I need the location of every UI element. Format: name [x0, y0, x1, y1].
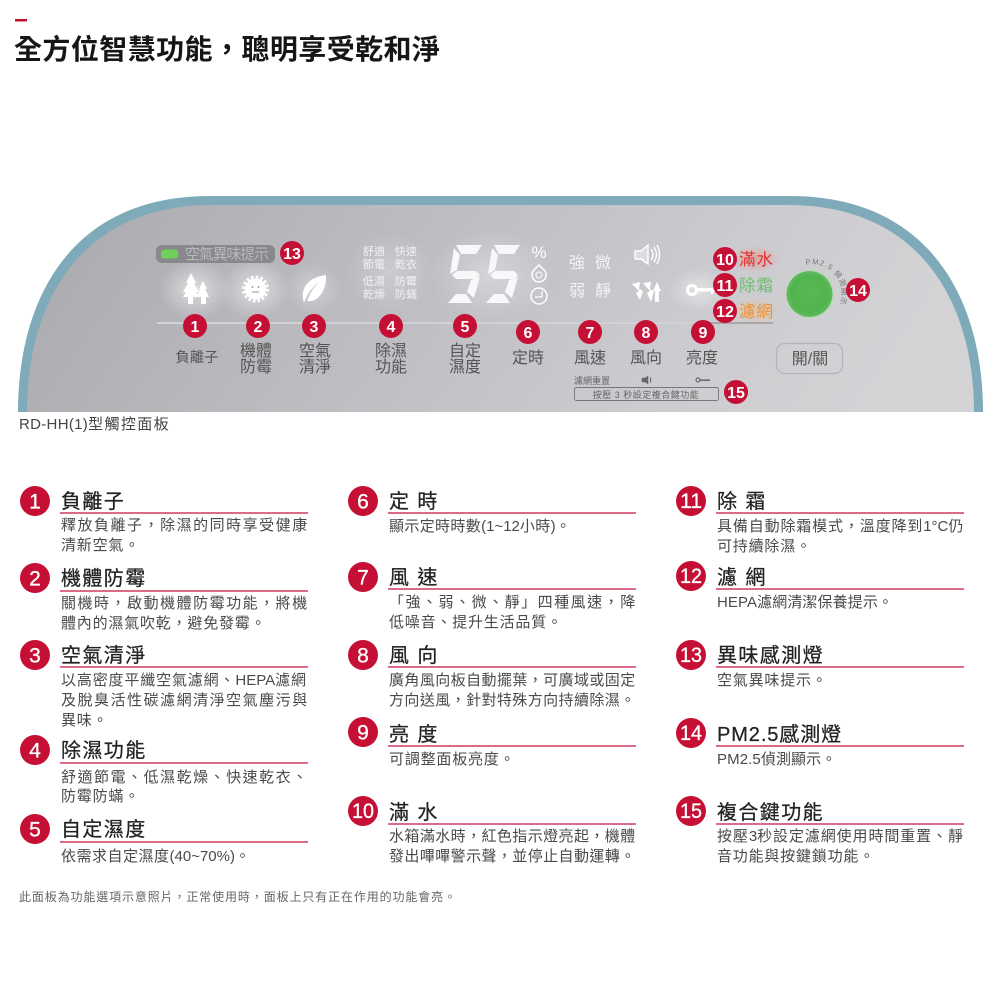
icon: speaker: [635, 245, 660, 264]
icon: key lock: [688, 286, 716, 294]
item 7: 風速: 「強、弱、微、靜」四種風速，降: [389, 594, 636, 611]
dehumidify mode labels: 防蟎: [395, 287, 417, 301]
item 13: 異味感測燈: 異味感測燈: [717, 644, 824, 667]
panel body: [18, 196, 983, 412]
icon glows: [159, 228, 728, 320]
title accent dash: [15, 19, 27, 22]
item 12: 濾網: 濾 網: [717, 566, 767, 589]
panel function labels: 空氣: [299, 342, 331, 360]
item 15: 複合鍵功能: 15: [680, 800, 702, 823]
panel callout badges: 2: [254, 319, 263, 336]
item 9: 亮度: [348, 717, 636, 768]
panel callout badges: 15: [727, 385, 745, 402]
panel callout badges: 11: [717, 278, 734, 295]
item 5: 自定濕度: 5: [29, 818, 41, 842]
item 11: 除霜: 具備自動除霜模式，溫度降到1°C仍: [717, 518, 964, 535]
footnote: 此面板為功能選項示意照片，正常使用時，面板上只有正在作用的功能會亮。: [19, 889, 456, 904]
item 8: 風向: [348, 640, 636, 709]
item 9: 亮度: 可調整面板亮度。: [389, 750, 515, 768]
display unit icons: %: [531, 243, 547, 262]
item 3: 空氣清淨: 及脫臭活性碳濾網清淨空氣塵污與: [61, 691, 308, 709]
item 10: 滿水: 10: [352, 800, 374, 823]
item 4: 除濕功能: 4: [29, 740, 41, 762]
item 14: PM2.5感測燈: [676, 718, 964, 768]
item 1: 負離子: 1: [29, 490, 41, 514]
item 8: 風向: 方向送風，針對特殊方向持續除濕。: [389, 692, 636, 709]
item 8: 風向: 風 向: [389, 644, 439, 667]
icon: wind direction arrows: [632, 282, 661, 302]
item 6: 定時: 定 時: [389, 490, 439, 513]
item 8: 風向: 廣角風向板自動擺葉，可廣域或固定: [389, 671, 636, 689]
fan speed labels: 強: [569, 254, 585, 272]
panel function labels: 負離子: [176, 348, 218, 366]
item 7: 風速: 風 速: [389, 566, 439, 589]
panel callout badges: 8: [642, 325, 651, 342]
dehumidify mode labels: 節電: [363, 257, 385, 271]
item 10: 滿水: 水箱滿水時，紅色指示燈亮起，機體: [389, 827, 636, 845]
item 4: 除濕功能: 防霉防蟎。: [61, 788, 140, 805]
panel function labels: 除濕: [375, 342, 407, 360]
panel callout badges: 12: [716, 304, 734, 321]
item 6: 定時: 顯示定時時數(1~12小時)。: [389, 518, 571, 535]
panel callout badges: 9: [699, 325, 708, 342]
item 9: 亮度: 亮 度: [389, 723, 439, 746]
item 11: 除霜: [676, 486, 964, 555]
item 7: 風速: [348, 562, 636, 631]
item 11: 除霜: 可持續除濕。: [717, 538, 812, 555]
item 2: 機體防霉: [20, 563, 308, 632]
power button: 開/關: [792, 351, 828, 368]
power button: [776, 344, 842, 374]
dehumidify mode labels: 低濕: [363, 274, 385, 288]
divider: [157, 322, 773, 324]
item 2: 機體防霉: 體內的濕氣吹乾，避免發霉。: [61, 615, 266, 632]
item 8: 風向: 8: [357, 644, 369, 668]
dehumidify mode labels: 乾燥: [363, 288, 385, 301]
icon: leaf: [303, 275, 326, 303]
panel function labels: 濕度: [449, 358, 481, 376]
item 12: 濾網: [676, 561, 964, 611]
item 7: 風速: 7: [357, 566, 369, 590]
PM2.5 indicator: PM2.5 偵測顯示: [806, 258, 847, 304]
panel function labels: 定時: [512, 349, 544, 367]
icon: trees: [183, 273, 209, 304]
dehumidify mode labels: 舒適: [363, 244, 385, 258]
item 3: 空氣清淨: 3: [29, 644, 41, 668]
item 10: 滿水: 發出嗶嗶警示聲，並停止自動運轉。: [389, 848, 636, 865]
item 14: PM2.5感測燈: PM2.5偵測顯示。: [717, 751, 836, 768]
item 6: 定時: [348, 486, 636, 535]
item 6: 定時: 6: [357, 490, 369, 514]
item 5: 自定濕度: [20, 814, 308, 865]
item 1: 負離子: [20, 486, 308, 554]
dehumidify mode labels: 快速: [395, 245, 417, 258]
panel: touch control panel: [18, 196, 983, 412]
item 2: 機體防霉: 機體防霉: [61, 567, 147, 590]
panel callout badges: 7: [586, 325, 595, 342]
combo key legend: 濾網重置: [574, 375, 610, 386]
status lights: 滿水: [739, 250, 774, 269]
panel callout badges: 6: [524, 325, 533, 342]
item 10: 滿水: [348, 796, 636, 865]
panel function labels: 風速: [574, 349, 606, 367]
fan speed labels: 微: [595, 254, 611, 272]
item 4: 除濕功能: 舒適節電、低濕乾燥、快速乾衣、: [61, 768, 308, 786]
status lights: 濾網: [739, 302, 773, 321]
item 11: 除霜: 除 霜: [717, 490, 767, 513]
combo key legend: [574, 375, 718, 400]
panel callout badges: 10: [716, 252, 734, 269]
item 10: 滿水: 滿 水: [389, 801, 439, 824]
title: 全方位智慧功能，聰明享受乾和淨: [14, 33, 440, 65]
panel callout badges: 1: [191, 319, 200, 336]
panel callout badges: 14: [849, 283, 867, 300]
panel callout badges: 13: [283, 246, 301, 263]
item 15: 複合鍵功能: 複合鍵功能: [717, 801, 824, 824]
odor indicator pill: [156, 245, 275, 263]
item 2: 機體防霉: 關機時，啟動機體防霉功能，將機: [61, 595, 308, 612]
item 3: 空氣清淨: 異味。: [61, 712, 108, 729]
panel callout badges: 4: [387, 319, 396, 336]
seven-segment display 55: [448, 245, 520, 303]
item 9: 亮度: 9: [357, 722, 369, 744]
item 15: 複合鍵功能: 按壓3秒設定濾網使用時間重置、靜: [717, 828, 964, 845]
item 12: 濾網: 12: [680, 565, 702, 588]
item 7: 風速: 低噪音、提升生活品質。: [389, 613, 563, 631]
panel caption: RD-HH(1)型觸控面板: [19, 416, 170, 433]
item 3: 空氣清淨: [20, 640, 308, 729]
panel function labels: 功能: [375, 358, 407, 376]
status lights: 除霜: [739, 276, 773, 295]
panel function labels: 機體: [240, 342, 272, 360]
item 13: 異味感測燈: 13: [680, 644, 702, 667]
panel callout badges: 5: [461, 319, 470, 336]
dehumidify mode labels: 乾衣: [395, 257, 417, 271]
item 1: 負離子: 清新空氣。: [61, 537, 140, 554]
item 3: 空氣清淨: 空氣清淨: [61, 644, 147, 667]
item 11: 除霜: 11: [680, 490, 702, 513]
item 13: 異味感測燈: 空氣異味提示。: [717, 672, 828, 689]
fan speed labels: 弱: [569, 282, 585, 300]
icon: sun mold face: [244, 277, 268, 301]
panel function labels: 清淨: [299, 358, 331, 376]
fan speed labels: [569, 254, 611, 300]
item 1: 負離子: 負離子: [61, 490, 125, 513]
panel function labels: 亮度: [686, 349, 718, 367]
PM2.5 indicator: [786, 258, 847, 318]
display unit icons: [531, 243, 547, 304]
panel callout badges: [183, 241, 870, 404]
item 5: 自定濕度: 自定濕度: [61, 818, 147, 841]
item 13: 異味感測燈: [676, 640, 964, 689]
item 14: PM2.5感測燈: PM2.5感測燈: [717, 723, 842, 746]
panel function labels: 自定: [449, 342, 481, 360]
item 1: 負離子: 釋放負離子，除濕的同時享受健康: [61, 516, 308, 534]
item 3: 空氣清淨: 以高密度平纖空氣濾網、HEPA濾網: [61, 672, 307, 689]
dehumidify mode labels: [363, 244, 417, 301]
panel function labels: [176, 342, 718, 376]
fan speed labels: 靜: [595, 282, 611, 300]
item 4: 除濕功能: [20, 735, 308, 805]
item 14: PM2.5感測燈: 14: [680, 722, 702, 745]
item 15: 複合鍵功能: [676, 796, 964, 865]
combo key legend: 按壓 3 秒設定複合鍵功能: [593, 389, 699, 400]
item 15: 複合鍵功能: 音功能與按鍵鎖功能。: [717, 848, 875, 865]
item 12: 濾網: HEPA濾網清潔保養提示。: [717, 593, 893, 611]
item 2: 機體防霉: 2: [29, 568, 41, 590]
item 5: 自定濕度: 依需求自定濕度(40~70%)。: [61, 848, 250, 865]
panel function labels: 風向: [630, 349, 662, 367]
item 4: 除濕功能: 除濕功能: [61, 739, 147, 762]
panel function labels: 防霉: [240, 358, 272, 376]
odor indicator pill: 空氣異味提示: [185, 246, 269, 263]
status lights: [729, 245, 781, 325]
panel callout badges: 3: [310, 319, 319, 336]
dehumidify mode labels: 防霉: [395, 274, 417, 288]
